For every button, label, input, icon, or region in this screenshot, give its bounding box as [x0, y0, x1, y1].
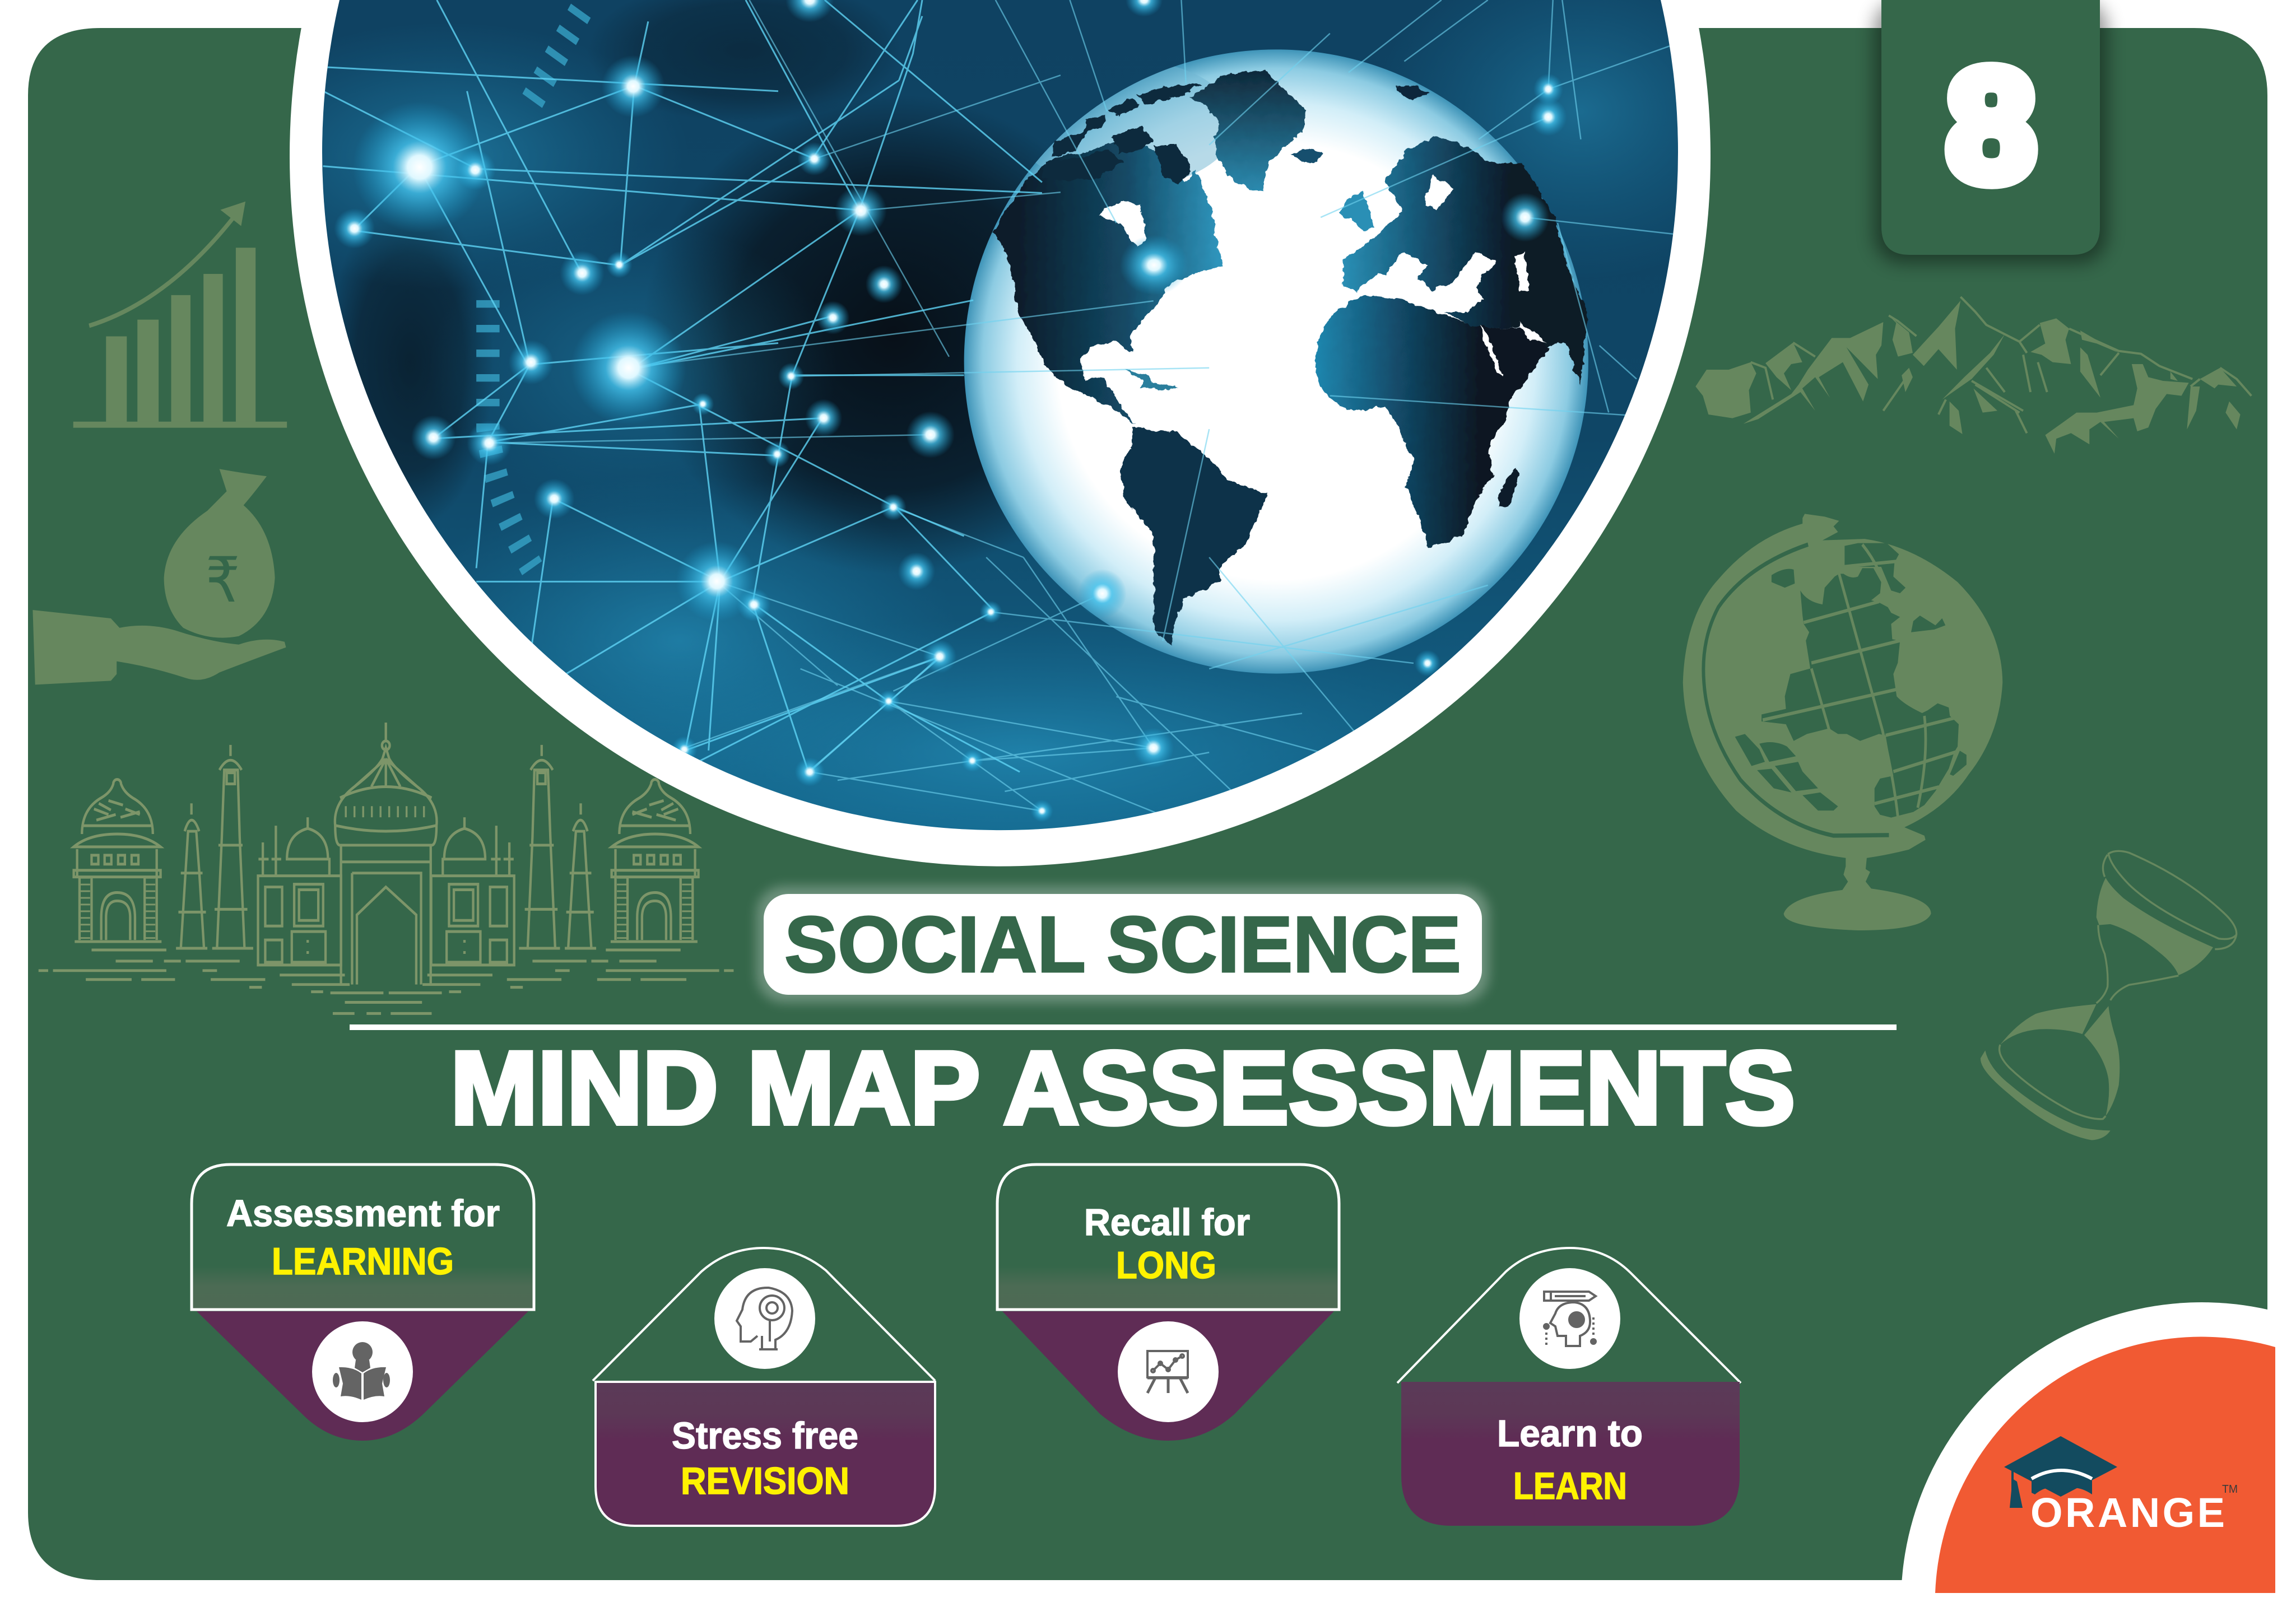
trademark: TM — [2222, 1483, 2238, 1496]
icon: head with gear — [737, 1288, 792, 1349]
icon: bar chart with rising arrow — [73, 202, 287, 428]
grade number: 8 — [1948, 37, 2035, 213]
white ring around photo — [290, 0, 1711, 867]
arctic shading — [1035, 66, 1219, 178]
logo wordmark: ORANGE — [2030, 1489, 2225, 1536]
icon: hand holding rupee money bag — [32, 469, 286, 684]
badge: recall for long — [997, 1165, 1339, 1441]
grade tab shadow — [1874, 0, 2107, 263]
subject pill: social science: SOCIAL SCIENCE — [784, 900, 1461, 989]
title: mind map assessments: MIND MAP ASSESSMENTS — [450, 1031, 1795, 1146]
icon: Indian monuments line art — [39, 723, 733, 1013]
network lines left of globe — [323, 0, 1042, 772]
icon: hand holding rupee money bag: ₹ — [206, 543, 240, 617]
photo: glowing network and globe — [322, 0, 1678, 830]
icon: mountain range — [1695, 297, 2251, 454]
badge: assessment for learning — [192, 1165, 534, 1441]
white arc behind logo — [1901, 1302, 2296, 1607]
subject pill glow — [756, 886, 1489, 1003]
icon: desk globe — [1683, 514, 2002, 930]
badge: learn to learn: LEARN — [1513, 1465, 1627, 1507]
badge: stress free revision: REVISION — [681, 1460, 849, 1502]
logo: graduation cap — [2004, 1436, 2117, 1508]
photo dial dashes — [488, 11, 581, 568]
globe sphere and continents — [964, 49, 1588, 674]
network lines across globe — [489, 0, 1674, 825]
grade tab — [1881, 0, 2100, 255]
icon: person reading — [333, 1342, 390, 1400]
glow over eastern America — [1122, 237, 1184, 292]
photo background — [322, 0, 1678, 830]
badge: learn to learn: Learn to — [1497, 1413, 1643, 1455]
badge: recall for long: Recall for — [1084, 1201, 1250, 1243]
badge: assessment for learning: LEARNING — [272, 1240, 454, 1283]
badge: stress free revision: Stress free — [672, 1415, 858, 1457]
badge: assessment for learning: Assessment for — [226, 1193, 500, 1235]
title rule — [350, 1024, 1897, 1030]
orange logo corner — [1935, 1337, 2275, 1593]
icon: hourglass — [1981, 851, 2237, 1140]
glowing nodes — [334, 0, 1567, 822]
badge: stress free revision — [593, 1248, 935, 1526]
icon: pencil over head with gear — [1544, 1292, 1596, 1346]
icon: presentation board — [1147, 1351, 1188, 1393]
badge: learn to learn — [1397, 1248, 1741, 1526]
continents — [993, 70, 1587, 646]
badge: recall for long: LONG — [1116, 1244, 1216, 1287]
